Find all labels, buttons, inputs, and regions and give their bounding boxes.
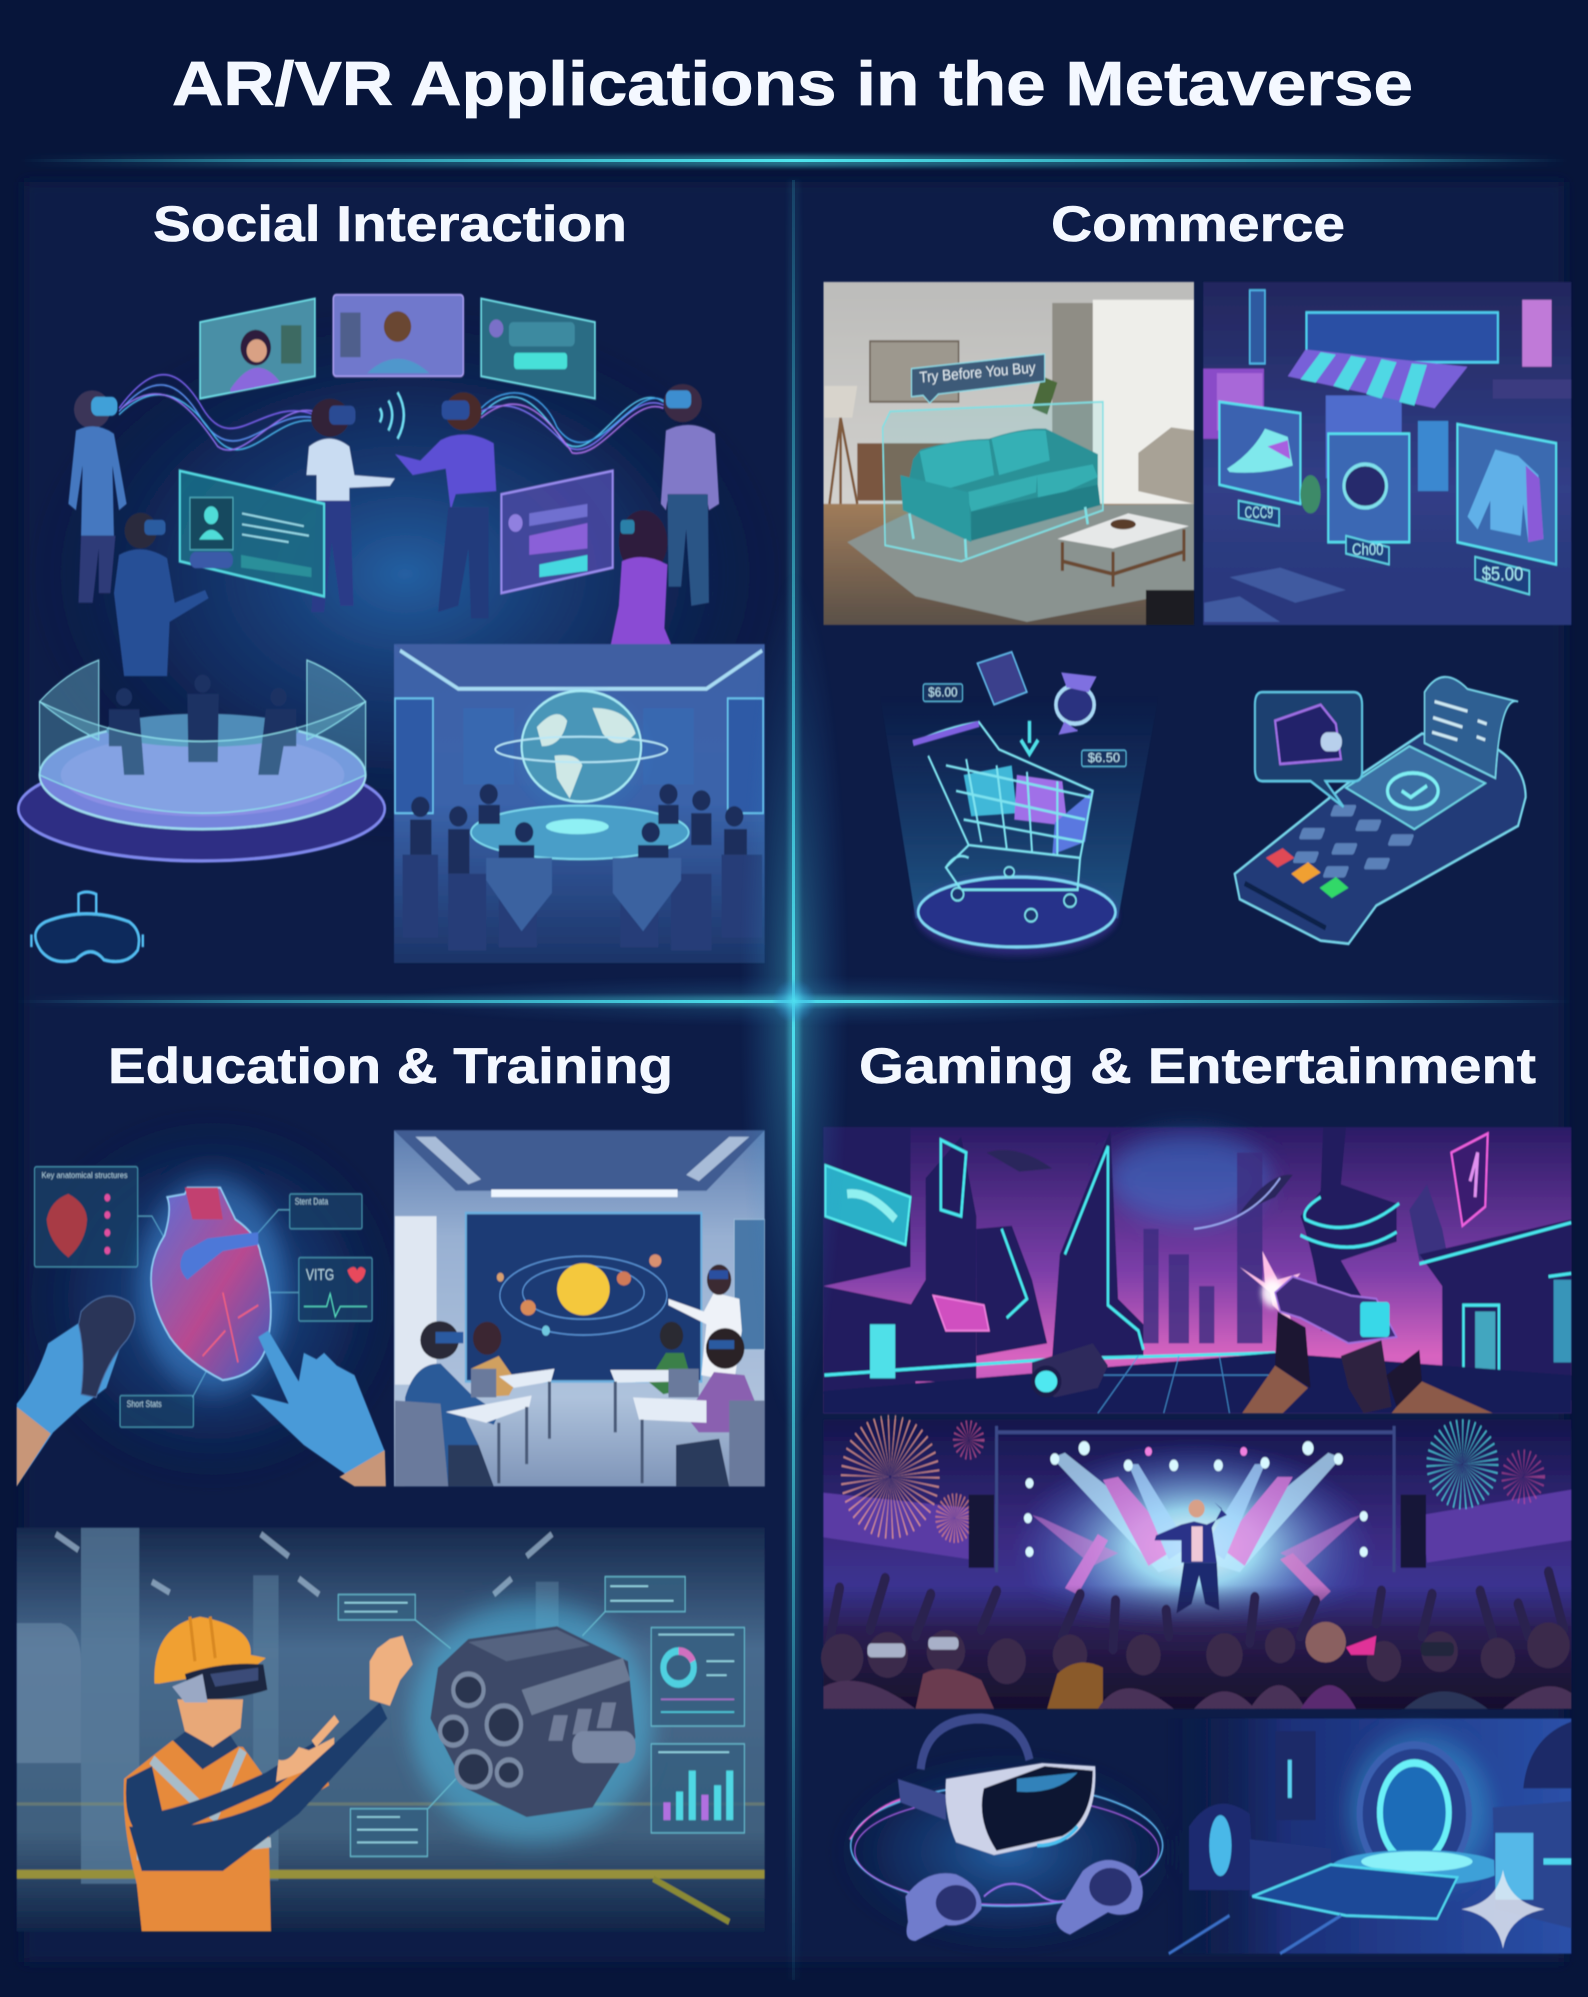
panel: social interaction <box>18 196 790 963</box>
callout: try before you buy <box>911 354 1045 403</box>
vr headset and controllers <box>824 1718 1189 1960</box>
virtual storefront: CCC9 <box>1245 503 1273 522</box>
anatomy lesson with holographic heart: Short Stats <box>127 1399 162 1409</box>
heading: social interaction: Social Interaction <box>153 196 627 252</box>
floating video screens <box>200 295 595 399</box>
panel: commerce <box>823 196 1571 955</box>
solar system classroom <box>394 1130 765 1486</box>
payment terminal and wallet <box>1235 677 1526 944</box>
try before you buy living room <box>823 282 1194 625</box>
globe conference room <box>394 644 765 963</box>
education scenes <box>10 1102 765 1931</box>
anatomy lesson with holographic heart: VITG <box>306 1266 334 1283</box>
holographic shopping cart: $6.00 <box>928 687 958 700</box>
gaming scenes <box>821 1127 1571 1960</box>
heading: gaming and entertainment: Gaming & Entertainment <box>859 1038 1536 1094</box>
holographic shopping cart: $6.50 <box>1088 752 1120 765</box>
commerce scene <box>823 282 1571 955</box>
callout: try before you buy: Try Before You Buy <box>919 358 1036 386</box>
virtual storefront: Ch00 <box>1352 540 1383 559</box>
divider centre glow <box>374 571 1214 1431</box>
sparkle watermark <box>1461 1870 1544 1949</box>
anatomy lesson with holographic heart: Stent Data <box>295 1197 329 1207</box>
anatomy lesson with holographic heart <box>10 1102 415 1496</box>
holographic shopping cart <box>880 652 1159 955</box>
icon: vr headset <box>31 892 143 962</box>
panel: education and training <box>10 1038 765 1931</box>
horizontal divider line <box>15 996 1573 1006</box>
panel: gaming and entertainment <box>821 1038 1571 1960</box>
vertical divider line <box>788 180 800 1980</box>
cyberpunk game city with blaster <box>823 1127 1571 1413</box>
voice waves <box>119 375 663 453</box>
virtual concert <box>821 1420 1571 1709</box>
hologram panels <box>180 471 613 596</box>
virtual storefront: $5.00 <box>1482 563 1523 585</box>
anatomy lesson with holographic heart: Key anatomical structures <box>42 1170 128 1180</box>
portal world scene <box>1164 1718 1571 1954</box>
virtual storefront <box>1203 282 1571 625</box>
people wearing headsets <box>68 384 719 676</box>
title: AR/VR Applications in the Metaverse <box>172 50 1413 119</box>
round virtual meeting table <box>18 660 385 861</box>
heading: education and training: Education & Training <box>108 1038 673 1094</box>
social interaction scene <box>18 295 790 963</box>
sound arcs <box>380 392 404 439</box>
heading: commerce: Commerce <box>1051 196 1345 252</box>
industrial training with engine hologram <box>17 1528 765 1931</box>
header divider line <box>20 155 1568 167</box>
